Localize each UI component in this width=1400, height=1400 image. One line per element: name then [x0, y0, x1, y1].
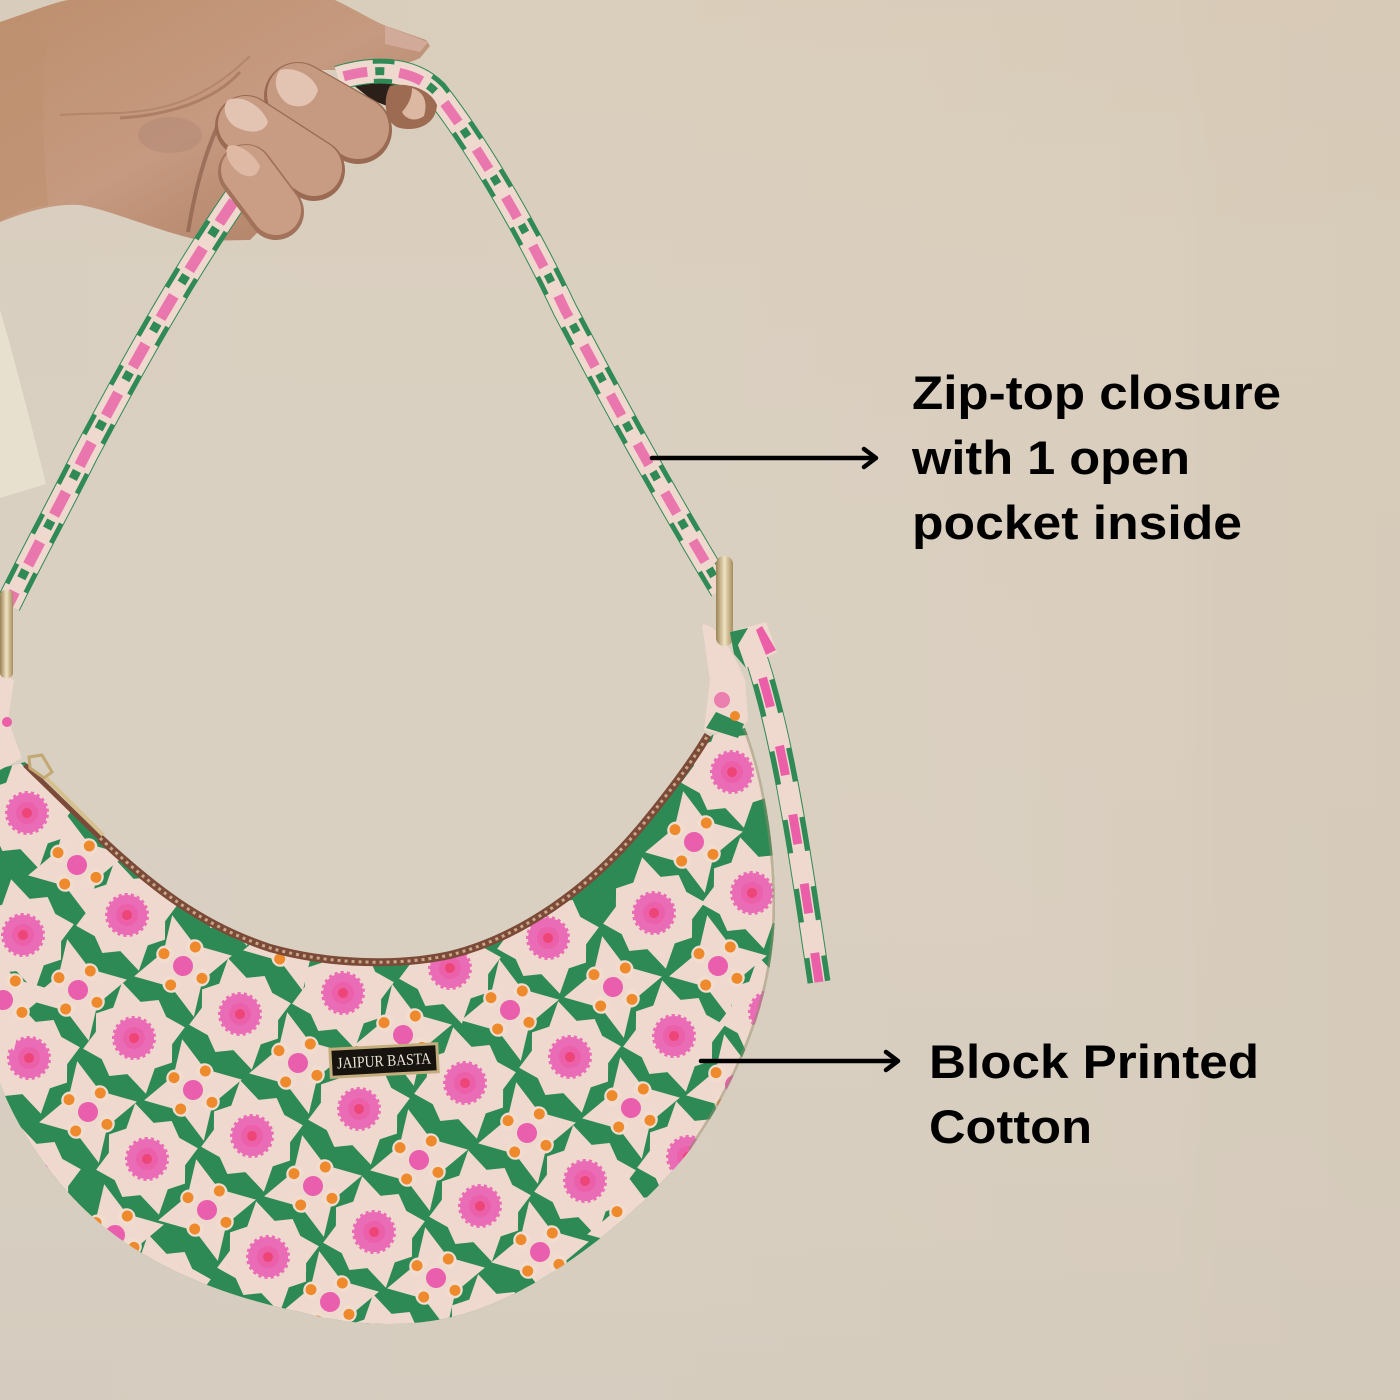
pinky finger: [386, 85, 437, 129]
zipper pull: [29, 755, 103, 835]
large flowers: [0, 705, 833, 1400]
palm and back of hand: [0, 0, 430, 240]
bag body with block print: [0, 728, 775, 1324]
left strap: [8, 198, 236, 605]
arrow: zip-top callout: [652, 449, 876, 467]
right strap: [338, 71, 722, 590]
strap shadow under loop: [352, 78, 402, 108]
callout: zip-top closure: with 1 open: [911, 431, 1190, 484]
small flowers: [0, 781, 795, 1363]
brand label: [328, 1042, 440, 1079]
middle finger: [225, 98, 314, 170]
fingers: [225, 69, 437, 212]
callout: block printed cotton: Cotton: [929, 1100, 1092, 1153]
callout: zip-top closure: Zip-top closure: [912, 366, 1281, 419]
zipper band: [25, 735, 708, 962]
strap tail: [750, 640, 819, 982]
right ring and knot: [702, 556, 777, 738]
callout: zip-top closure: pocket inside: [912, 496, 1242, 549]
arrow: block printed callout: [701, 1052, 898, 1070]
index finger: [226, 145, 276, 212]
brand label: JAIPUR BASTA: [337, 1051, 432, 1072]
left strap tab and ring: [0, 590, 22, 770]
callout: block printed cotton: Block Printed: [929, 1035, 1259, 1088]
callout: zip-top closure: [911, 366, 1281, 549]
ring finger: [276, 69, 358, 130]
callout: block printed cotton: [929, 1035, 1259, 1153]
white fabric at left edge: [0, 310, 46, 498]
